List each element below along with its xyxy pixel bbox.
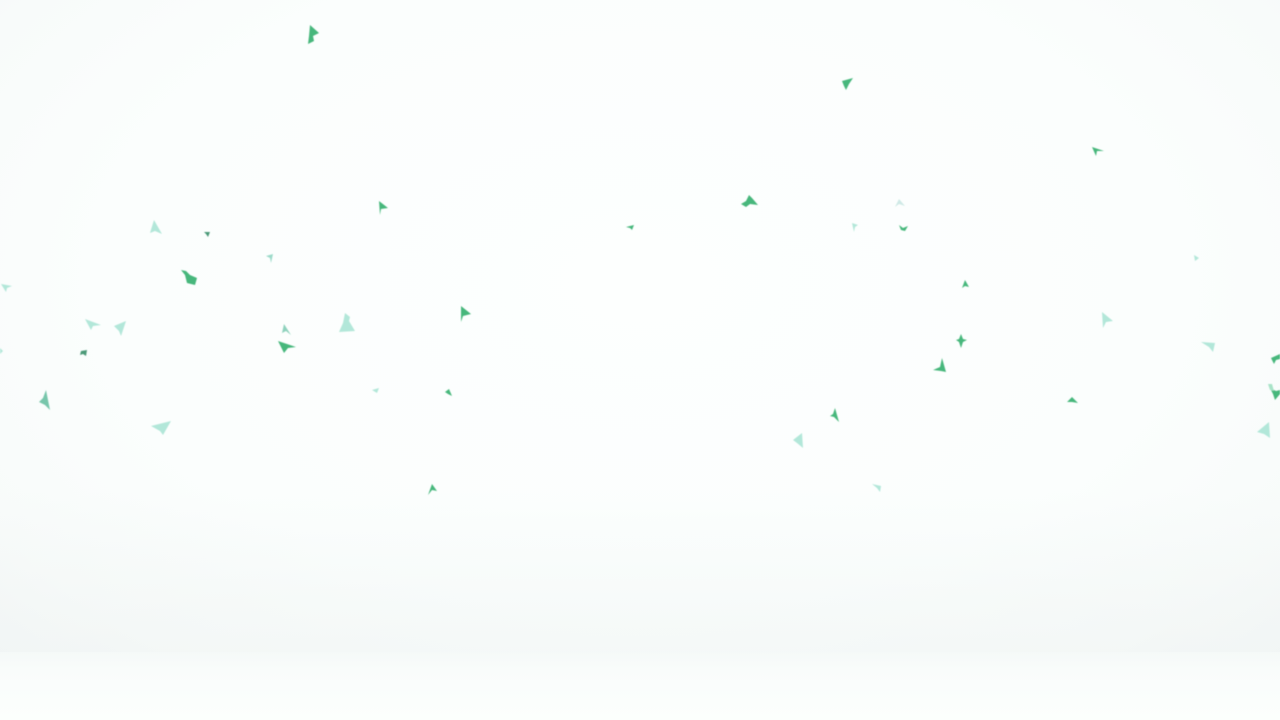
floor band xyxy=(0,652,1280,720)
confetti: dark green shards xyxy=(80,25,1280,495)
confetti: pale mint shards xyxy=(0,199,1274,492)
confetti field xyxy=(0,25,1280,495)
